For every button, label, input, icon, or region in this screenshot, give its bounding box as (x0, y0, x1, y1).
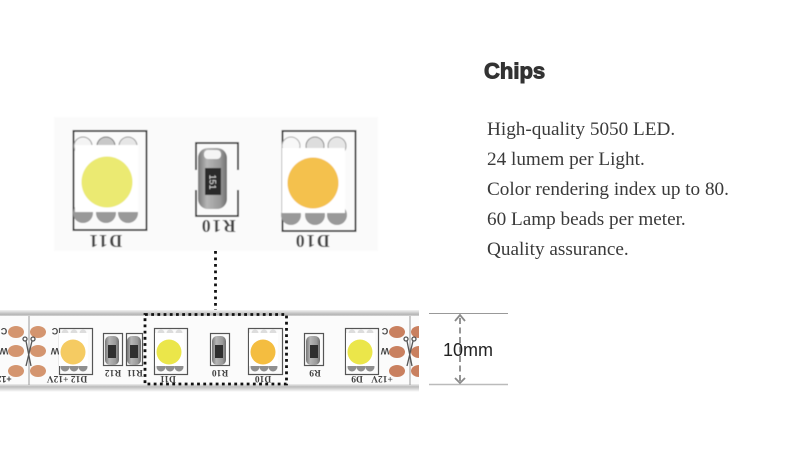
strip LED D10 (248, 328, 282, 374)
label: R10: R10 (200, 216, 236, 236)
LED chip D11 (73, 131, 146, 230)
label: D11: D11 (88, 231, 122, 251)
panel: LED strip (0, 310, 427, 392)
pad letters: C (381, 326, 388, 336)
strip LED D9 (346, 328, 378, 374)
text block: chip features: High-quality 5050 LED. (487, 119, 675, 140)
strip silkscreen labels: +12V (371, 373, 393, 383)
text block: chip features: Color rendering index up to 80. (487, 179, 729, 200)
strip resistor R10 (210, 334, 230, 366)
text block: chip features: 60 Lamp beads per meter. (487, 209, 686, 230)
dotted connector line (214, 251, 217, 313)
dotted selection box (145, 314, 286, 384)
label: D10: D10 (294, 231, 330, 251)
strip resistors R12 and R11 (104, 334, 142, 366)
text block: chip features: 24 lumem per Light. (487, 149, 645, 170)
pad letters: C (0, 326, 7, 336)
scissors mark left (23, 337, 35, 366)
LED chip D10 (281, 131, 356, 231)
dimension marker: 10mm (429, 314, 508, 384)
strip silkscreen labels (46, 370, 392, 382)
dimension label: 10mm (443, 340, 493, 360)
copper pads right (389, 326, 419, 377)
strip silkscreen labels: R10 (212, 367, 228, 377)
pad letters: W (0, 346, 8, 356)
text block: chip features (487, 119, 729, 260)
scissors mark right (404, 337, 416, 366)
pad letters: W (50, 346, 59, 356)
heading: Chips: Chips (484, 58, 545, 84)
strip silkscreen labels: D10 (255, 373, 271, 383)
strip resistor R9 (304, 334, 324, 366)
pad letters: C (51, 326, 58, 336)
strip silkscreen labels: R9 (309, 367, 321, 377)
strip LED D12 (59, 328, 92, 374)
copper pads left (8, 326, 46, 377)
strip silkscreen labels: R12 (105, 367, 121, 377)
resistor R10 (196, 143, 238, 216)
pad letters (0, 326, 389, 384)
strip silkscreen labels: D9 (351, 373, 363, 383)
strip silkscreen labels: D12 +12V (47, 373, 87, 383)
strip LED D11 (154, 328, 188, 374)
strip silkscreen labels: R11 (127, 367, 143, 377)
pad letters: W (380, 346, 389, 356)
panel: enlarged chip close-up (54, 117, 378, 251)
resistor R10: 151 (208, 174, 218, 190)
strip silkscreen labels: D11 (160, 373, 176, 383)
text block: chip features: Quality assurance. (487, 239, 629, 260)
